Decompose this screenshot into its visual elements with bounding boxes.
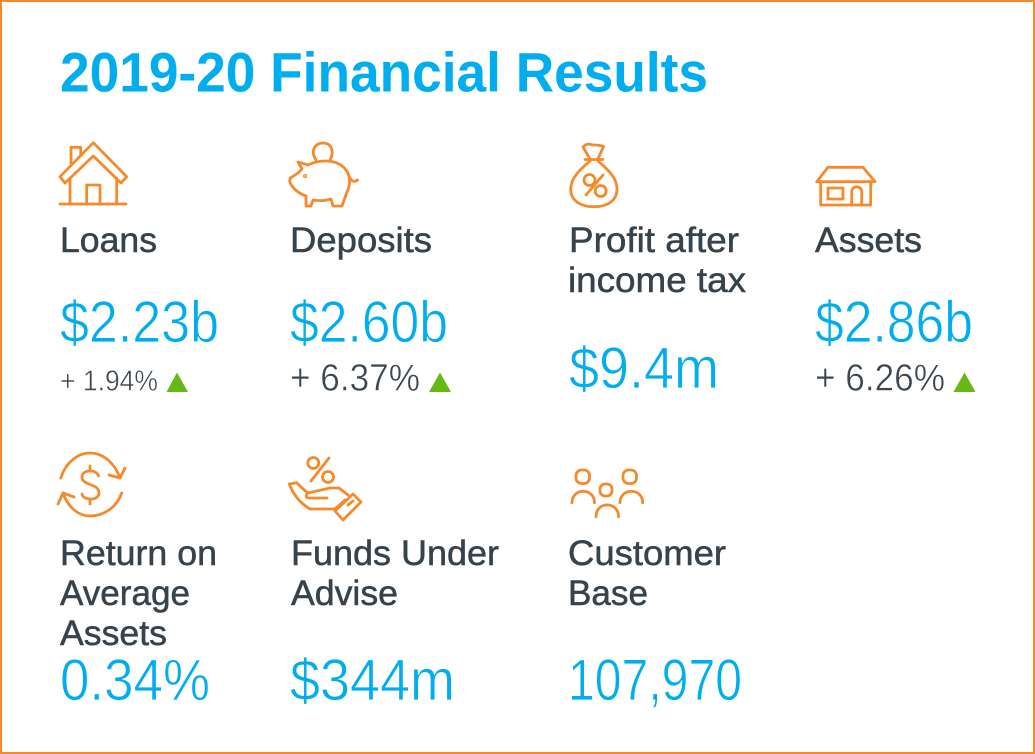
value: deposits: $2.60b xyxy=(290,290,448,355)
icon: shop building xyxy=(817,167,875,205)
value: funds: $344m xyxy=(290,648,455,713)
icon: hand with percent xyxy=(289,458,361,520)
label: funds under advise: Funds Under xyxy=(291,534,499,573)
icon: three people xyxy=(572,470,643,517)
label: funds under advise xyxy=(291,534,499,613)
change: loans: + 1.94% xyxy=(60,366,158,398)
label: customer base: Base xyxy=(568,574,648,613)
label: profit after income tax: income tax xyxy=(568,261,747,300)
label: return on average assets: Average xyxy=(60,574,190,613)
icon: up triangle xyxy=(954,372,976,392)
icon: money bag with percent xyxy=(571,144,617,207)
label: loans: Loans xyxy=(60,221,157,260)
label: customer base xyxy=(568,534,726,613)
panel: return on average assets xyxy=(58,453,217,713)
icon: dollar with cycle arrows xyxy=(58,453,125,516)
icon: house xyxy=(60,143,127,204)
title: 2019-20 Financial Results xyxy=(60,40,708,104)
label: assets: Assets xyxy=(815,221,922,260)
label: return on average assets xyxy=(60,534,217,653)
label: funds under advise: Advise xyxy=(291,574,398,613)
icon: up triangle xyxy=(166,372,188,392)
label: customer base: Customer xyxy=(568,534,726,573)
panel: customer base xyxy=(568,470,742,713)
panel: funds under advise xyxy=(289,458,499,713)
panel: deposits xyxy=(290,143,451,400)
label: return on average assets: Assets xyxy=(60,614,167,653)
value: loans: $2.23b xyxy=(60,290,219,355)
icon: up triangle xyxy=(429,372,451,392)
change: assets: + 6.26% xyxy=(815,358,945,400)
panel: assets xyxy=(815,167,976,400)
label: deposits: Deposits xyxy=(290,221,432,260)
label: return on average assets: Return on xyxy=(60,534,217,573)
value: assets: $2.86b xyxy=(815,290,973,355)
label: profit after income tax: Profit after xyxy=(569,221,739,260)
panel: loans xyxy=(60,143,219,398)
value: profit: $9.4m xyxy=(569,336,719,401)
label: profit after income tax xyxy=(568,221,747,300)
value: customers: 107,970 xyxy=(568,648,742,713)
panel: profit after income tax xyxy=(568,144,747,401)
value: return: 0.34% xyxy=(60,648,210,713)
icon: piggy bank xyxy=(290,143,358,206)
change: deposits: + 6.37% xyxy=(290,358,420,400)
